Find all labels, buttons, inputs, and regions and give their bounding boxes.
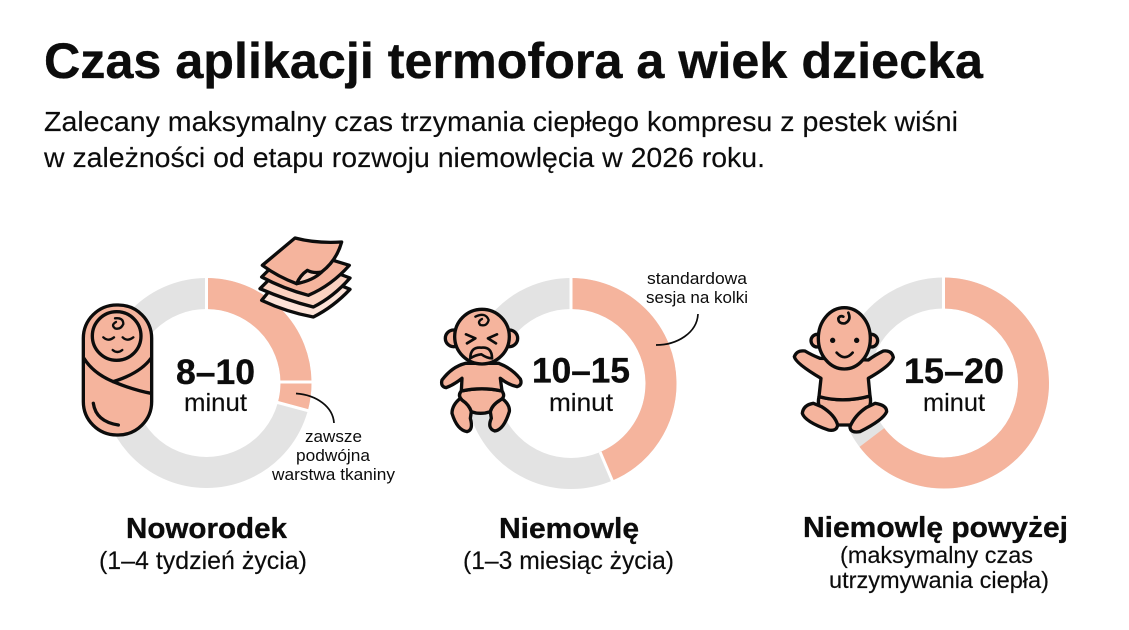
subtitle: Zalecany maksymalny czas trzymania ciepłego kompresu z pestek wiśni xyxy=(44,106,958,137)
subtitle: w zależności od etapu rozwoju niemowlęcia w 2026 roku. xyxy=(43,142,765,173)
icon: stacked cloth layers xyxy=(260,238,350,317)
title: Czas aplikacji termofora a wiek dziecka xyxy=(44,33,984,89)
donut chart: 10-15 minutes xyxy=(481,272,661,491)
label: infant: (1–3 miesiąc życia) xyxy=(463,547,674,575)
label: older infant: Niemowlę powyżej xyxy=(803,512,1068,544)
label: newborn: (1–4 tydzień życia) xyxy=(99,547,307,575)
value: 15-20 minut: minut xyxy=(923,389,985,417)
callout: double fabric layer: warstwa tkaniny xyxy=(271,466,396,484)
callout: double fabric layer: podwójna xyxy=(296,447,371,465)
panel: newborn xyxy=(83,238,396,575)
value: 10-15 minut: 10–15 xyxy=(532,352,630,390)
value: 15-20 minut xyxy=(904,352,1004,417)
value: 10-15 minut: minut xyxy=(549,389,613,417)
value: 8-10 minut xyxy=(176,353,255,417)
icon: happy baby xyxy=(794,308,893,432)
label: older infant xyxy=(803,512,1068,593)
callout: standard colic session: sesja na kolki xyxy=(646,289,748,307)
value: 8-10 minut: 8–10 xyxy=(176,353,255,392)
label: older infant: (maksymalny czas xyxy=(840,542,1033,568)
value: 8-10 minut: minut xyxy=(184,389,247,417)
label: older infant: utrzymywania ciepła) xyxy=(829,567,1049,593)
label: infant: Niemowlę xyxy=(499,513,639,545)
callout: standard colic session xyxy=(646,270,748,345)
icon: swaddled baby xyxy=(83,305,152,435)
callout: double fabric layer: zawsze xyxy=(305,428,362,446)
label: newborn: Noworodek xyxy=(126,513,288,545)
subtitle xyxy=(43,106,958,173)
panel: infant xyxy=(442,270,748,575)
label: infant xyxy=(463,513,674,575)
value: 10-15 minut xyxy=(532,352,630,417)
value: 15-20 minut: 15–20 xyxy=(904,352,1004,391)
icon: crying baby xyxy=(442,309,521,432)
donut chart: 8-10 minutes xyxy=(117,272,316,472)
donut chart: 15-20 minutes xyxy=(854,272,1034,473)
callout: double fabric layer xyxy=(271,394,396,484)
panel: older infant xyxy=(794,272,1068,593)
callout: standard colic session: standardowa xyxy=(647,270,748,288)
label: newborn xyxy=(99,513,307,575)
